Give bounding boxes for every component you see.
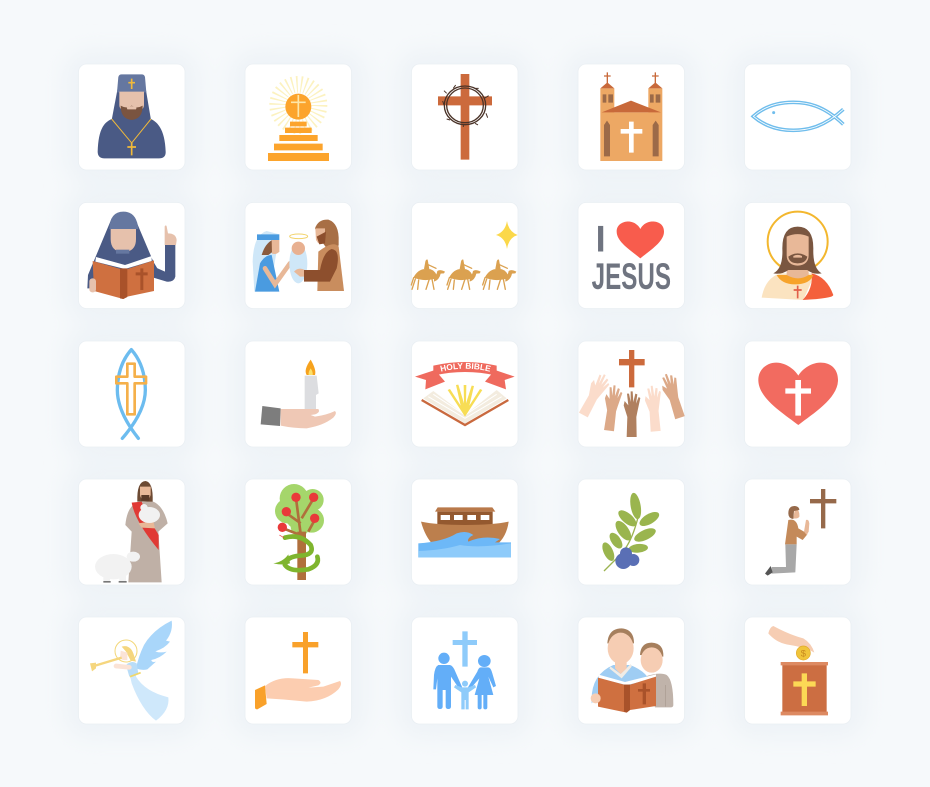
card: priest <box>78 64 185 170</box>
card: holy family <box>245 202 352 308</box>
icon: apple tree with snake <box>273 484 324 580</box>
card: heart with cross <box>744 341 851 447</box>
icon: Jesus with halo <box>762 212 833 300</box>
icon: I heart Jesus <box>592 218 671 297</box>
icon: Mary, Joseph and baby <box>253 220 344 292</box>
icon: Jesus with sheep <box>95 481 168 583</box>
icon: hand dropping coin into box: $ <box>801 648 807 658</box>
card: noah's ark <box>412 479 518 585</box>
icon: cross and crown of thorns <box>438 74 492 160</box>
icon: I heart Jesus: JESUS <box>592 255 671 297</box>
card: three wise men <box>411 202 518 308</box>
icon: heart and cross <box>758 363 838 425</box>
icon: preacher with book <box>87 212 177 299</box>
card: candle on hand <box>245 341 352 447</box>
icon: I heart Jesus: I <box>596 218 606 260</box>
icon: hand with candle <box>261 360 336 428</box>
icon: man and boy reading bible <box>591 628 673 713</box>
icon: kneeling man and cross <box>765 489 836 576</box>
card: holy bible <box>412 342 518 446</box>
icon: church <box>600 72 662 161</box>
icon: altar <box>268 84 329 161</box>
icon: family silhouette <box>433 631 496 709</box>
card: hands reaching to cross <box>576 341 688 447</box>
card: family and cross <box>412 617 518 724</box>
icon: ark on water <box>418 507 511 557</box>
card: good shepherd <box>78 479 185 585</box>
icon: open hand under cross <box>255 632 341 709</box>
icon: fish <box>753 102 843 130</box>
icon: priest <box>98 74 166 158</box>
card: I love Jesus <box>578 202 684 308</box>
card: altar with host <box>245 64 352 170</box>
card: ichthys fish <box>744 64 851 170</box>
icon: open bible with ribbon: HOLY BIBLE <box>440 362 491 372</box>
card: preaching priest <box>78 202 185 308</box>
card: angel with trumpet <box>78 617 185 724</box>
card: tree and serpent <box>245 479 352 585</box>
card: olive branch <box>578 479 684 585</box>
card: church <box>578 64 684 170</box>
icon: angel <box>90 621 172 721</box>
card: fish and cross <box>78 341 185 447</box>
icon: camels and star <box>411 221 518 289</box>
icon: vertical fish with cross <box>116 350 146 438</box>
card: cross with thorns <box>412 64 518 170</box>
card: parent and child reading <box>578 617 684 724</box>
card: praying man <box>744 479 851 585</box>
icon: olive branch with berries <box>600 492 661 571</box>
card: Jesus portrait <box>744 202 851 308</box>
card: donation box <box>744 617 851 724</box>
card: hand with cross <box>245 617 352 724</box>
icon: raised hands and cross <box>576 350 688 437</box>
